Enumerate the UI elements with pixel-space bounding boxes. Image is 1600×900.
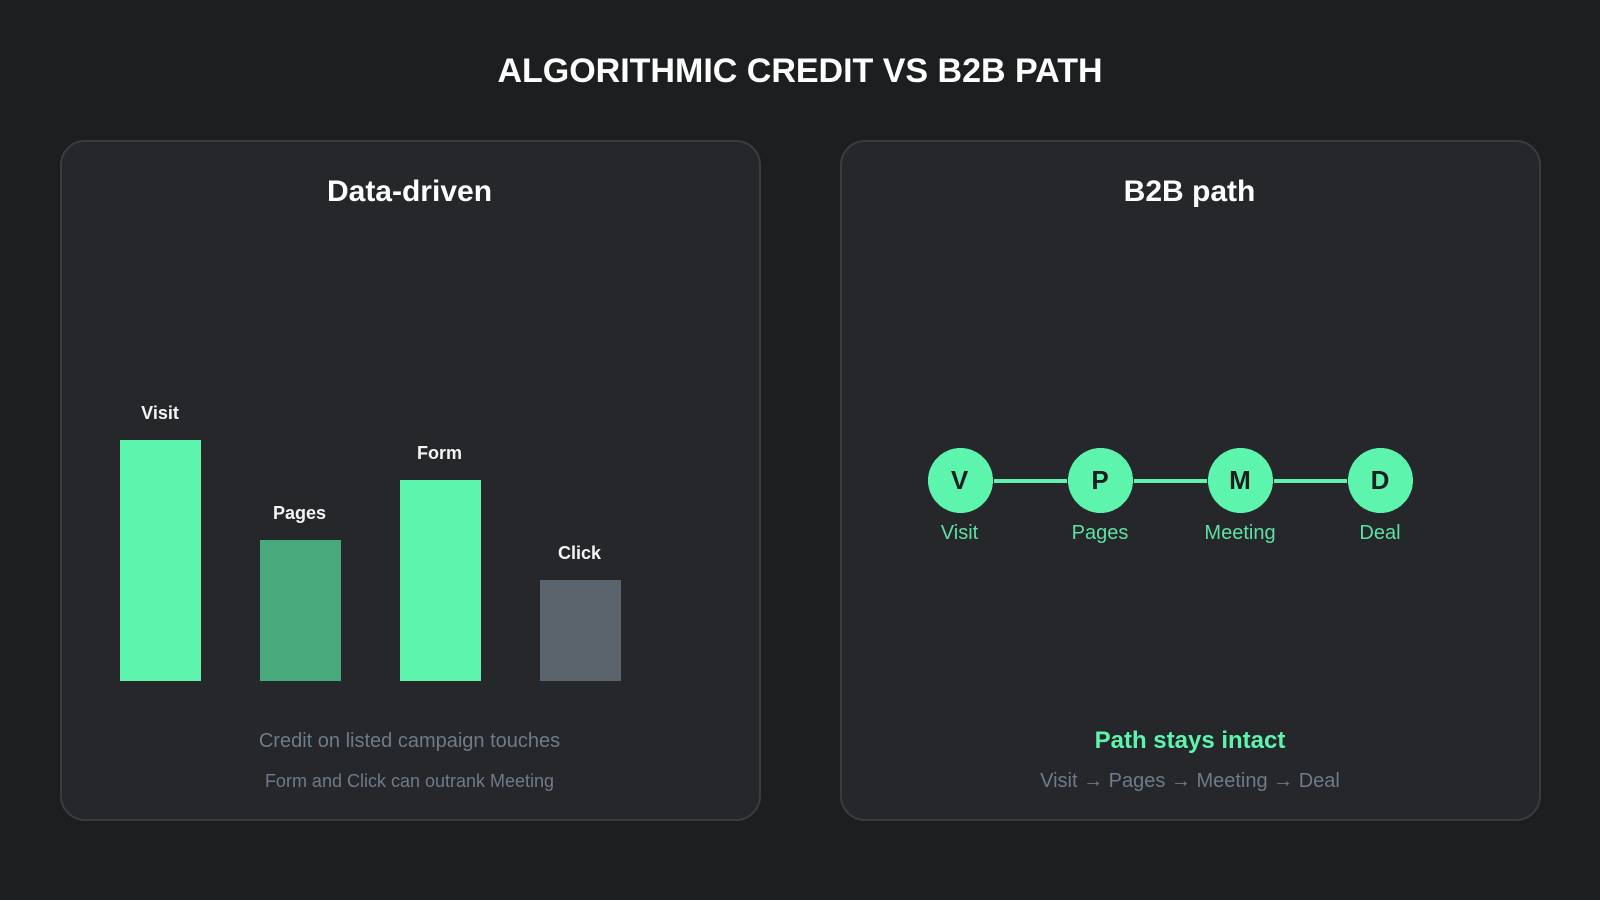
bar chart	[120, 403, 621, 681]
node: meeting: Meeting	[1204, 522, 1276, 544]
caption: form and click: Form and Click can outrank Meeting	[265, 771, 554, 791]
node: visit	[928, 448, 993, 544]
bar: click	[540, 543, 621, 681]
path diagram	[928, 448, 1413, 544]
panel: data-driven	[61, 141, 760, 820]
node: meeting	[1204, 448, 1276, 544]
node: meeting: M	[1229, 465, 1251, 495]
caption: path sequence: Visit → Pages → Meeting → Deal	[1040, 770, 1340, 792]
bar: pages	[260, 503, 341, 681]
panel heading: data-driven: Data-driven	[327, 175, 492, 208]
connector: meeting to deal	[1274, 479, 1347, 483]
connector: pages to meeting	[1134, 479, 1207, 483]
node: pages: P	[1091, 465, 1109, 495]
node: visit: Visit	[941, 522, 979, 544]
title: ALGORITHMIC CREDIT VS B2B PATH	[497, 52, 1103, 90]
bar: visit: Visit	[141, 403, 179, 423]
node: deal: D	[1371, 465, 1389, 495]
node: deal: Deal	[1359, 522, 1401, 544]
bar: form: Form	[417, 443, 462, 463]
node: pages: Pages	[1072, 522, 1128, 544]
panel background	[61, 141, 760, 820]
bar: visit	[120, 403, 201, 681]
connector: visit to pages	[994, 479, 1067, 483]
caption: credit on touches: Credit on listed campaign touches	[259, 730, 560, 752]
bar: click: Click	[558, 543, 602, 563]
callout: path stays intact: Path stays intact	[1095, 727, 1285, 754]
panel heading: b2b path: B2B path	[1124, 175, 1255, 208]
node: visit: V	[951, 465, 969, 495]
node: deal	[1348, 448, 1413, 544]
panel background	[841, 141, 1540, 820]
bar: pages: Pages	[273, 503, 326, 523]
panel: b2b path	[841, 141, 1540, 820]
bar: form	[400, 443, 481, 681]
node: pages	[1068, 448, 1133, 544]
